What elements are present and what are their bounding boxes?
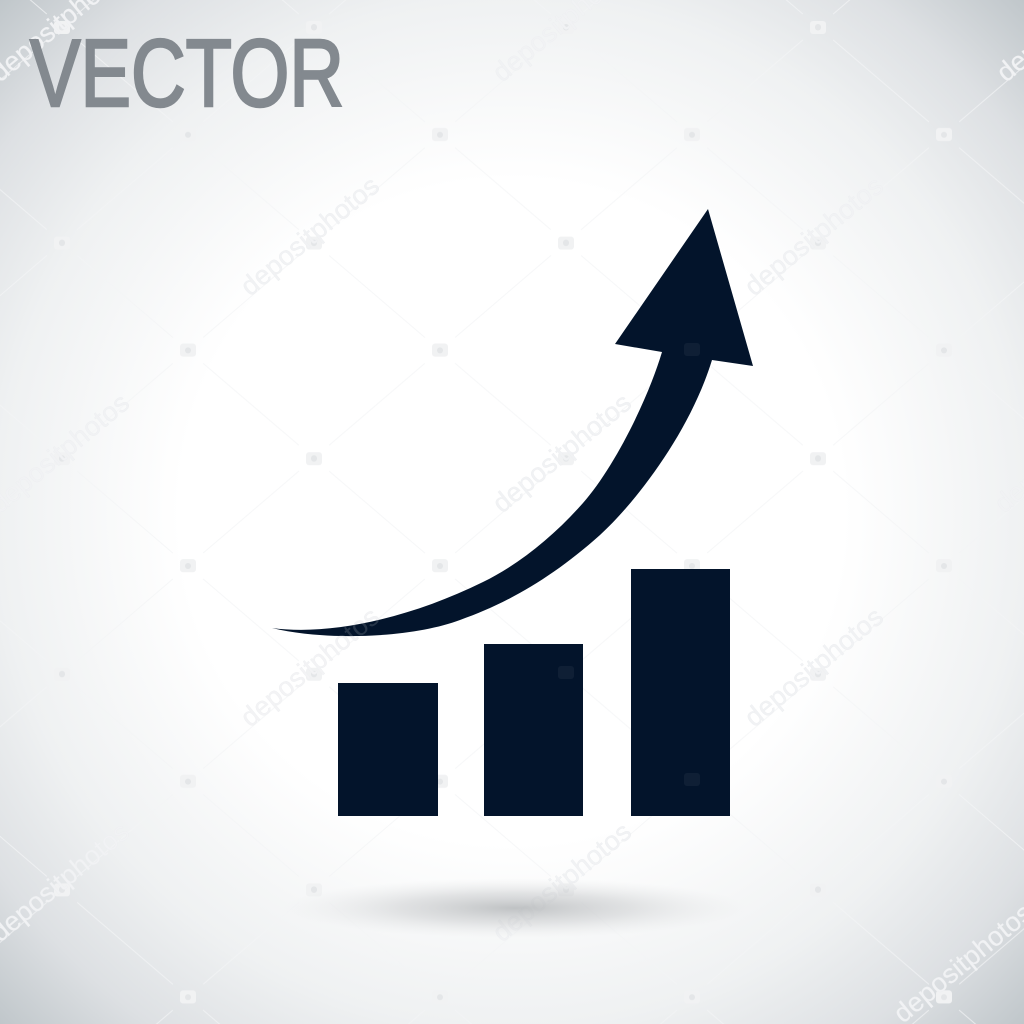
watermark over dark shapes bbox=[235, 343, 700, 786]
bar 3 bbox=[631, 569, 730, 816]
watermarks: depositphotos bbox=[487, 816, 637, 948]
watermark over dark shapes: depositphotos bbox=[235, 601, 385, 733]
icon: rising arrow bbox=[272, 209, 753, 636]
watermarks: depositphotos bbox=[739, 601, 889, 733]
bar 2 bbox=[484, 644, 583, 816]
bar chart bbox=[338, 569, 730, 816]
ground shadow bbox=[283, 878, 747, 938]
title: VECTOR: VECTOR bbox=[30, 20, 344, 127]
bar 1 bbox=[338, 683, 438, 816]
watermarks: depositphotos bbox=[487, 387, 637, 519]
watermarks: depositphotos bbox=[235, 601, 385, 733]
watermarks: depositphotos bbox=[739, 170, 889, 302]
watermarks: depositphotos bbox=[235, 170, 385, 302]
